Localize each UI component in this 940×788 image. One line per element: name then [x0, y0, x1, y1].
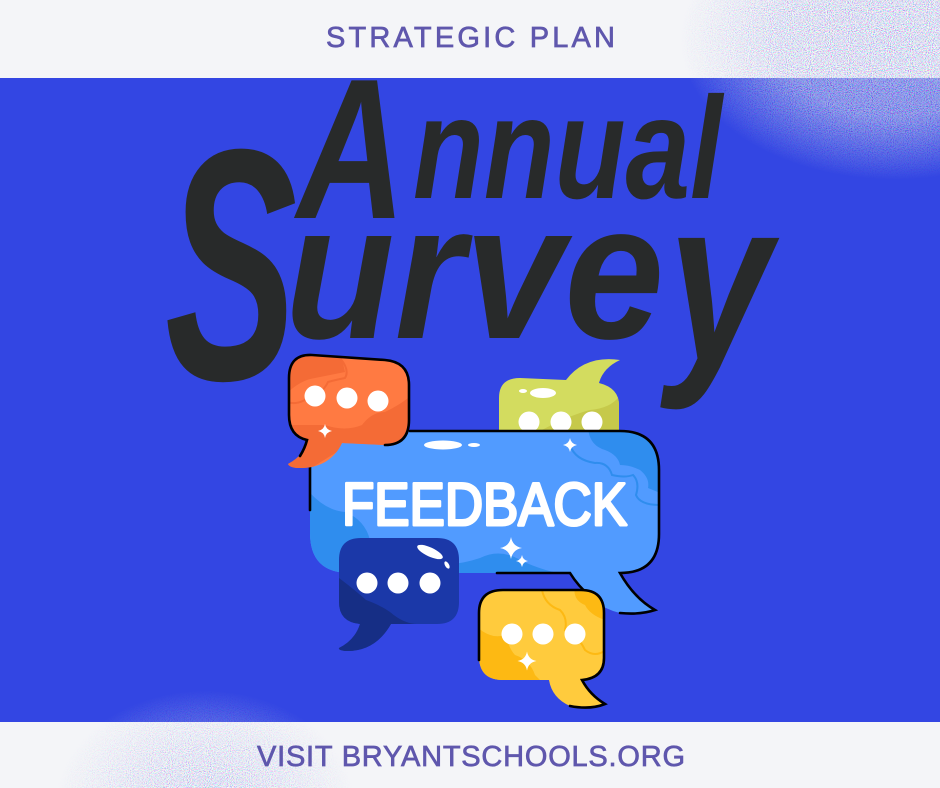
- speech bubble: orange: [288, 354, 410, 468]
- label: FEEDBACK: FEEDBACK: [342, 471, 627, 538]
- title: Survey: urve: [285, 164, 664, 379]
- title: Annual: [294, 38, 725, 261]
- title: Survey: S: [165, 81, 298, 449]
- speech bubble: large blue with FEEDBACK: [300, 425, 665, 614]
- title: Survey: [165, 81, 780, 449]
- title: Annual: nnual: [413, 67, 725, 229]
- title: Annual: A: [294, 38, 405, 261]
- sparkles: [500, 438, 577, 567]
- title: Survey: y: [660, 150, 780, 411]
- heading: strategic plan: STRATEGIC PLAN: [326, 22, 615, 54]
- speech bubble: yellow: [470, 585, 606, 708]
- bottom banner: [0, 722, 940, 788]
- speech bubble: green: [499, 359, 625, 432]
- footer: website: VISIT BRYANTSCHOOLS.ORG: [257, 741, 685, 773]
- noise glow: bottom left: [67, 697, 344, 788]
- top banner: [0, 0, 940, 78]
- noise glow: top right: [687, 0, 940, 175]
- speech bubble: navy: [338, 538, 459, 651]
